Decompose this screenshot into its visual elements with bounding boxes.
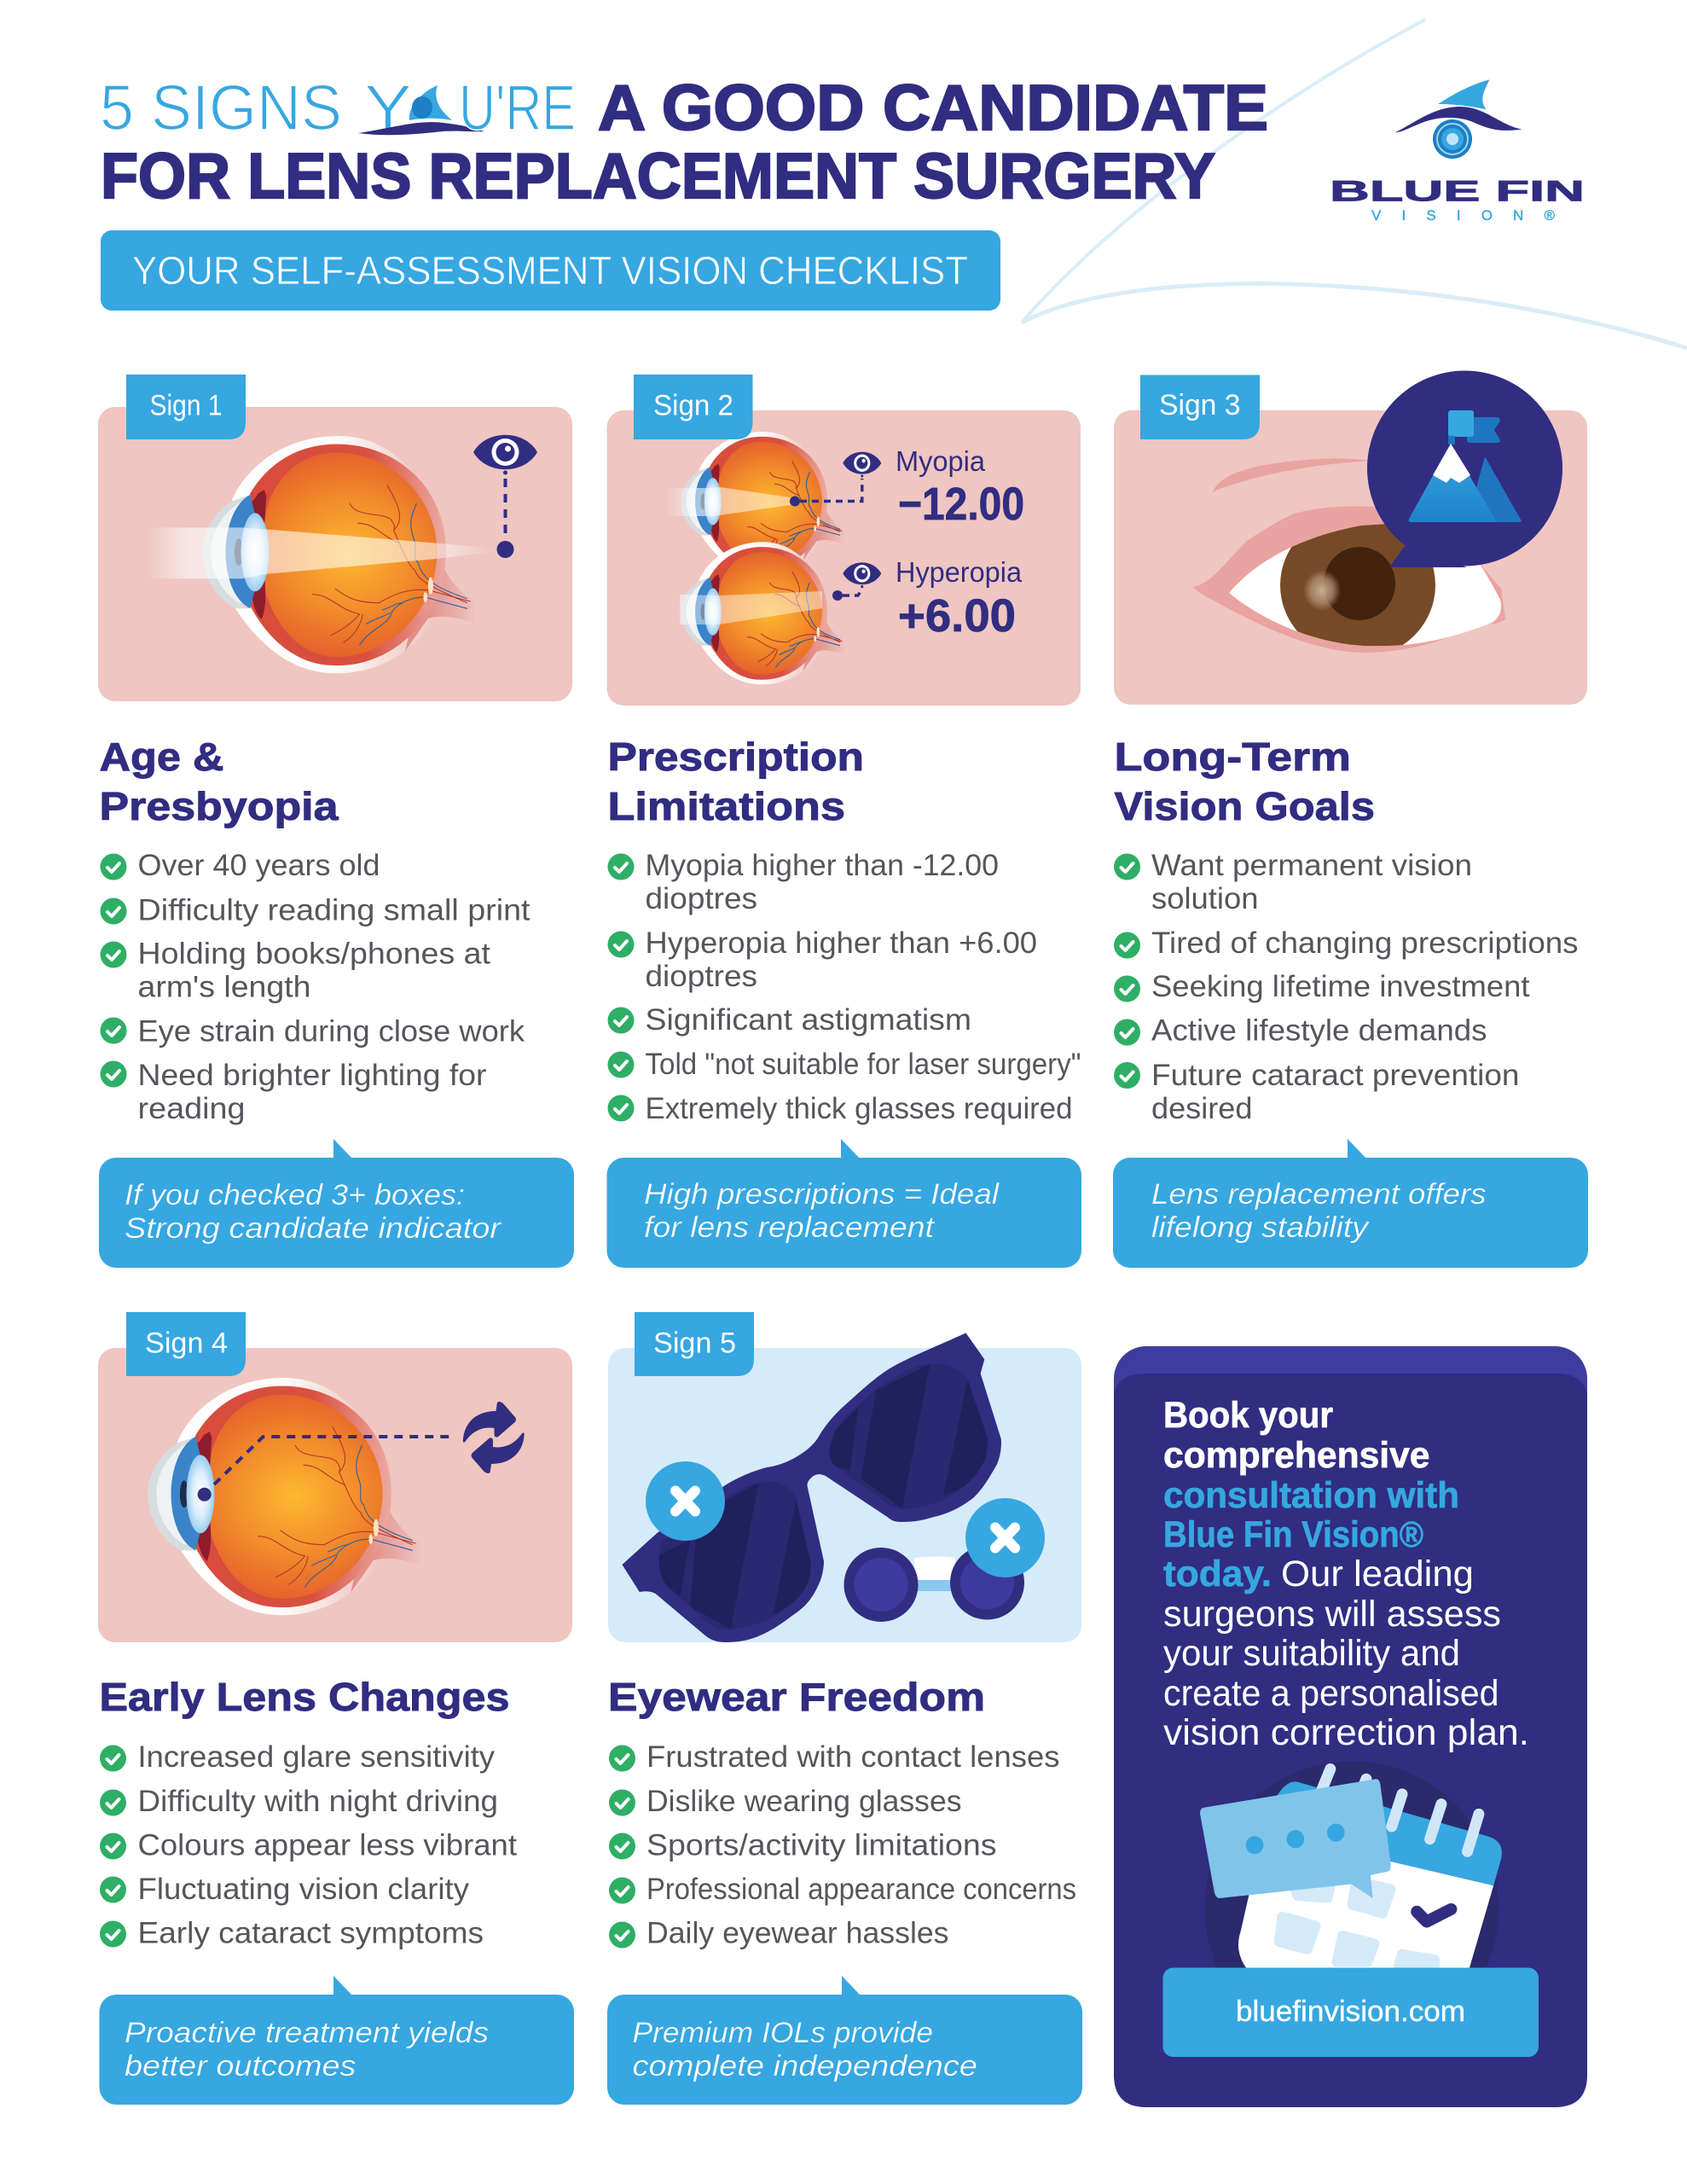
item: solution [1151,881,1259,915]
CTA text: comprehensive [1163,1435,1429,1476]
CTA text: Blue Fin Vision® [1163,1514,1423,1555]
icon: cross on glasses [646,1461,725,1541]
CTA text [1163,1395,1529,1753]
speech bubble with mountain goal [1367,370,1562,567]
item: Dislike wearing glasses [646,1784,962,1818]
tab: Sign 1 [126,375,246,439]
item: Eye strain during close work [138,1014,525,1048]
callout: for lens replacement [644,1211,936,1244]
eyebrow crease [1213,458,1373,492]
callout: Premium IOLs provide [633,2017,933,2049]
callout [607,1139,1081,1268]
website button [1163,1967,1539,2057]
title: Y [364,72,412,143]
item: Hyperopia higher than +6.00 [645,926,1037,960]
title eye and fin in the word YOU [358,85,484,135]
callout [1113,1139,1588,1268]
item [1114,1058,1520,1125]
column 3 text: Long-Term Vision Goals [1113,735,1588,1268]
hyperopia label [896,556,1023,642]
item: dioptres [645,959,757,993]
eye cross-section [148,1378,420,1615]
callout: High prescriptions = Ideal [644,1178,1000,1211]
panel: Sign 2 illustration [607,410,1081,706]
tab: Sign 2: Sign 2 [653,389,733,421]
mountain and flag icon [1408,410,1522,522]
tab: Sign 5: Sign 5 [653,1327,736,1360]
checklist [607,848,1081,1125]
item: Difficulty reading small print [138,892,530,926]
eye cross-section [202,436,475,673]
item: Need brighter lighting for [138,1058,487,1092]
contact lenses [844,1546,1024,1622]
heading: Limitations [607,784,845,828]
tab: Sign 5 [635,1312,754,1376]
item [1114,848,1472,915]
light beam [149,527,496,578]
title [100,72,1268,212]
callout [607,1976,1082,2105]
tab: Sign 3 [1140,375,1260,439]
calendar and speech bubble illustration [1200,1762,1502,2055]
website button: bluefinvision.com [1236,1995,1465,2028]
callout: better outcomes [125,2050,357,2082]
sunglasses [622,1333,1001,1642]
eyelid [1193,507,1505,653]
item: Tired of changing prescriptions [1151,926,1578,960]
myopia label [896,445,1024,530]
tab: Sign 1: Sign 1 [150,389,222,421]
logo: Blue Fin Vision: BLUE FIN [1330,176,1585,208]
panel: call to action [1114,1346,1587,2107]
column 2 text: Prescription Limitations [607,735,1081,1268]
panel: Sign 5 illustration [608,1333,1081,1642]
myopia pointer [790,452,881,507]
callout [99,1976,574,2105]
CTA text: Our leading [1281,1554,1474,1594]
item: Active lifestyle demands [1151,1014,1487,1048]
item: Difficulty with night driving [138,1784,498,1818]
tab: Sign 4: Sign 4 [145,1327,228,1360]
hyperopia label: +6.00 [898,590,1016,642]
heading: Long-Term [1114,735,1351,779]
item: Over 40 years old [138,848,380,882]
heading: Prescription [607,735,864,779]
CTA text: surgeons will assess [1163,1594,1501,1635]
checklist [1114,848,1578,1125]
title: A GOOD CANDIDATE [598,72,1268,143]
item: Future cataract prevention [1151,1058,1520,1092]
item: Frustrated with contact lenses [646,1740,1059,1774]
eye white [1229,520,1501,646]
item: Professional appearance concerns [646,1872,1076,1906]
title: U'RE [459,72,576,143]
CTA text: Book your [1163,1395,1333,1436]
item: dioptres [645,881,757,915]
title: 5 SIGNS [100,72,342,143]
heading: Vision Goals [1114,784,1375,828]
callout: Lens replacement offers [1151,1178,1486,1211]
item: Colours appear less vibrant [138,1827,517,1862]
myopia label: −12.00 [898,479,1024,530]
callout: lifelong stability [1151,1211,1370,1244]
checklist [609,1740,1076,1950]
item: Seeking lifetime investment [1151,969,1530,1003]
checklist [101,848,530,1125]
panel: Sign 1 illustration [98,407,572,701]
item: Extremely thick glasses required [645,1091,1073,1125]
logo icon: fin and eye [1395,79,1522,159]
heading: Early Lens Changes [99,1675,510,1719]
checklist [100,1740,517,1950]
column 5 text: Eyewear Freedom [607,1675,1082,2105]
title: FOR LENS REPLACEMENT SURGERY [101,140,1215,212]
heading: Presbyopia [99,784,339,828]
item: Sports/activity limitations [646,1827,996,1862]
tab: Sign 3: Sign 3 [1159,389,1240,421]
CTA text: consultation with [1163,1475,1459,1516]
myopia label: Myopia [896,445,986,477]
item: Holding books/phones at [138,937,490,971]
hyperopia pointer [832,562,881,601]
item: Myopia higher than -12.00 [645,848,999,882]
item [101,1058,487,1125]
dashed pointer from lens [198,1437,450,1502]
item: desired [1151,1091,1252,1125]
CTA text: today. [1163,1554,1272,1594]
item: reading [138,1091,246,1125]
callout: Proactive treatment yields [125,2017,489,2049]
item: Want permanent vision [1151,848,1472,882]
item [607,848,999,915]
heading [99,735,339,828]
item: arm's length [138,969,310,1003]
callout [99,1139,574,1268]
logo: Blue Fin Vision [1330,79,1585,224]
heading: Age & [99,735,223,779]
heading [1114,735,1375,828]
column 1 text: Age & Presbyopia [99,735,574,1268]
panel: Sign 4 illustration [98,1348,572,1642]
background swoosh lines [1022,20,1687,348]
eye icon with dashed pointer [473,435,537,558]
CTA text: vision correction plan. [1163,1712,1529,1753]
tab: Sign 4 [126,1312,246,1376]
callout: Strong candidate indicator [125,1212,502,1245]
logo: Blue Fin Vision: VISION® [1371,207,1555,224]
panel: Sign 3 illustration [1114,370,1587,705]
CTA text: your suitability and [1163,1633,1460,1674]
item: Told "not suitable for laser surgery" [645,1047,1081,1081]
subtitle banner [101,230,1000,311]
tab: Sign 2 [634,375,752,439]
heading: Eyewear Freedom [608,1675,985,1719]
item [101,937,490,1003]
item: Significant astigmatism [645,1002,971,1037]
column 4 text: Early Lens Changes [99,1675,574,2105]
CTA text: create a personalised [1163,1673,1499,1714]
hyperopia eye [680,542,845,684]
subtitle banner: YOUR SELF-ASSESSMENT VISION CHECKLIST [132,248,968,293]
hyperopia label: Hyperopia [896,556,1023,588]
item: Daily eyewear hassles [646,1916,948,1950]
callout: complete independence [633,2050,977,2082]
item [607,926,1037,993]
iris and pupil [1280,524,1435,647]
icon: cross on contact lenses [965,1498,1045,1577]
item: Early cataract symptoms [138,1916,484,1950]
item: Fluctuating vision clarity [138,1872,469,1906]
icon: refresh arrows [463,1402,525,1473]
callout: If you checked 3+ boxes: [125,1179,465,1211]
heading [607,735,864,828]
item: Increased glare sensitivity [138,1740,495,1774]
myopia eye [665,432,845,574]
